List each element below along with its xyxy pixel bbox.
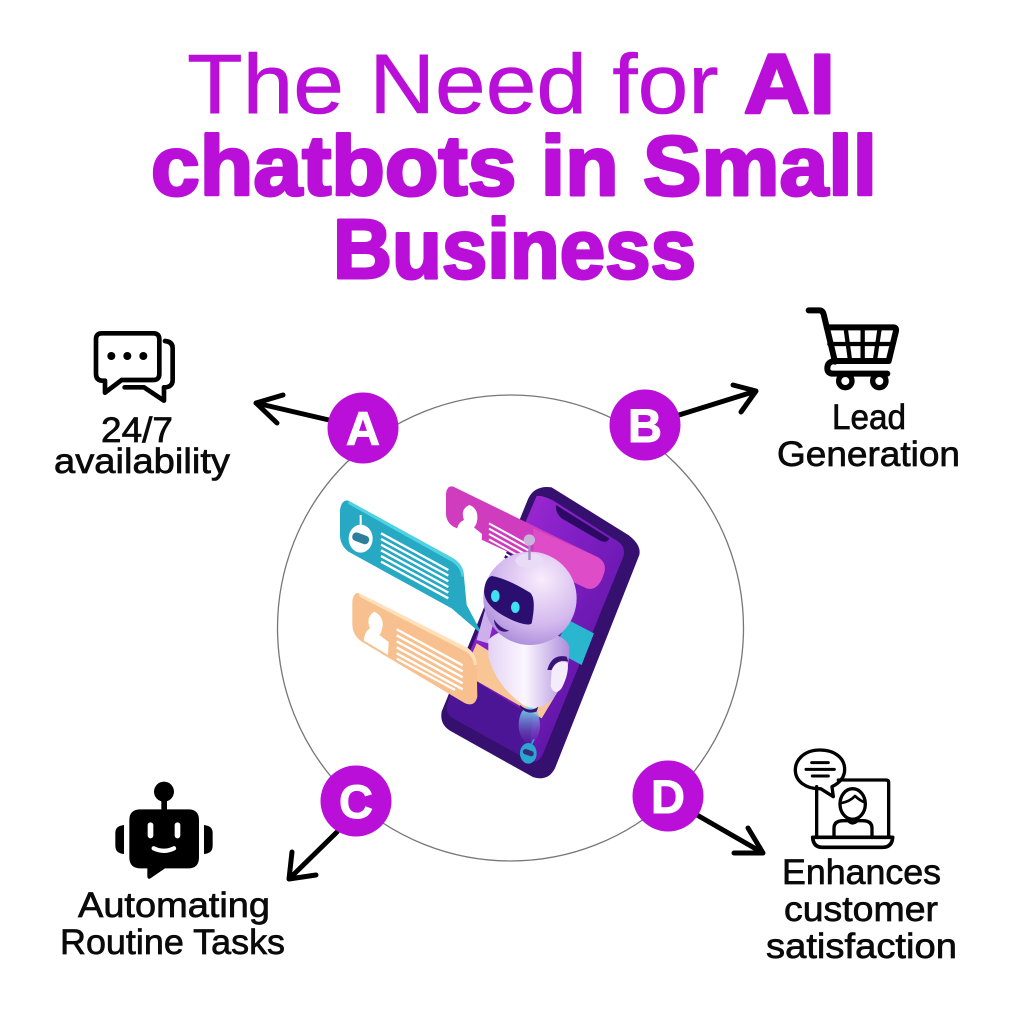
title xyxy=(151,37,877,296)
marker C with arrow xyxy=(289,766,392,879)
marker A with arrow xyxy=(256,392,398,464)
teal robot message bubble xyxy=(340,501,483,635)
label: Enhances customer satisfaction: customer xyxy=(784,890,938,929)
label: Enhances customer satisfaction xyxy=(766,853,957,966)
magenta message bubble xyxy=(446,486,605,589)
icon: person on laptop with speech bubble xyxy=(795,750,893,847)
label: Enhances customer satisfaction: satisfaction xyxy=(766,927,957,966)
label: Lead Generation: Lead xyxy=(832,398,906,437)
small robot badge xyxy=(520,739,537,764)
icon: robot head xyxy=(115,782,213,879)
phone xyxy=(441,487,640,778)
title: Business xyxy=(333,202,696,296)
peach message bubble xyxy=(352,593,477,704)
icon: shopping cart xyxy=(809,310,896,388)
marker D with arrow xyxy=(632,760,763,853)
label: Automating Routine Tasks: Automating xyxy=(78,886,270,925)
marker B with arrow: B xyxy=(628,399,662,452)
central ring xyxy=(278,395,744,861)
label: Lead Generation xyxy=(777,398,960,474)
marker B with arrow xyxy=(610,385,756,460)
label: 24/7 availability: 24/7 xyxy=(101,411,173,450)
label: 24/7 availability xyxy=(54,411,231,481)
marker D with arrow: D xyxy=(651,770,685,823)
label: Automating Routine Tasks xyxy=(60,886,285,962)
title: chatbots in Small xyxy=(151,119,877,213)
label: Enhances customer satisfaction: Enhances xyxy=(782,853,941,892)
label: Automating Routine Tasks: Routine Tasks xyxy=(60,923,285,962)
icon: chat bubbles xyxy=(96,333,173,401)
robot xyxy=(477,534,577,743)
label: 24/7 availability: availability xyxy=(54,442,231,481)
illustration: robot emerging from phone with chat bubbles xyxy=(340,486,640,778)
label: Lead Generation: Generation xyxy=(777,435,960,474)
title: The Need for AI xyxy=(187,37,835,131)
marker A with arrow: A xyxy=(346,402,380,455)
marker C with arrow: C xyxy=(339,775,373,828)
